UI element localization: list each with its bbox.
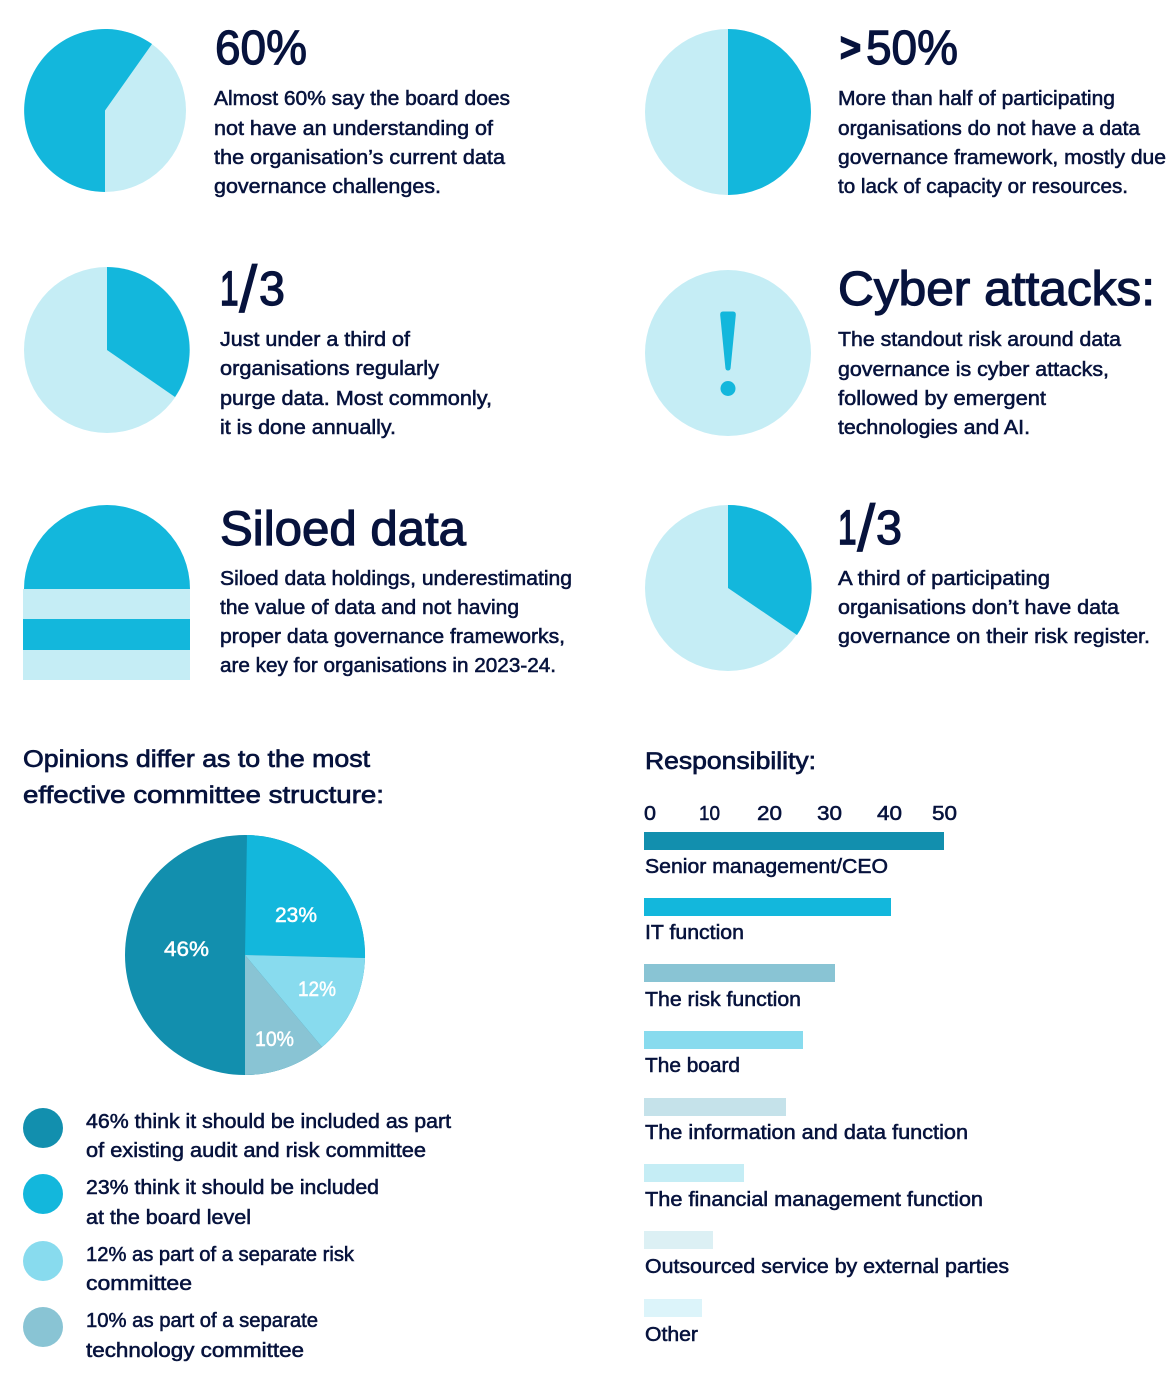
legend item: 46% <box>23 1108 451 1162</box>
icon: 60% pie <box>24 29 186 192</box>
text block: 60% description: Almost 60% say the board does <box>214 88 510 110</box>
text block: cyber description: The standout risk around data <box>838 329 1122 351</box>
heading: Cyber attacks: Cyber attacks: <box>838 263 1155 316</box>
heading: 1/3 <box>838 491 902 565</box>
bar: The information and data function <box>644 1098 968 1144</box>
text block: cyber description: technologies and AI. <box>838 417 1030 439</box>
legend item: 23%: at the board level <box>86 1207 251 1229</box>
bar: The information and data function: The information and data function <box>645 1122 968 1144</box>
bar: Other: Other <box>645 1324 698 1346</box>
panel: cyber attacks <box>645 263 1155 439</box>
panel: committee structure <box>23 746 451 1362</box>
heading: 1/3: 1 <box>220 263 238 316</box>
legend item: 23%: 23% think it should be included <box>86 1177 379 1199</box>
text block: 60% description: governance challenges. <box>214 176 441 198</box>
heading: 1/3: 3 <box>876 502 902 555</box>
pie chart: committee opinions <box>125 835 365 1075</box>
axis labels <box>644 803 957 825</box>
bar: IT function <box>644 898 891 944</box>
icon: striped semicircle <box>23 505 190 680</box>
legend item: 10% <box>23 1307 318 1362</box>
legend item: 46%: of existing audit and risk committee <box>86 1140 426 1162</box>
text block: siloed description: proper data governance frameworks, <box>220 626 565 648</box>
text block: risk register description: governance on their risk register. <box>838 626 1150 648</box>
axis labels: 30 <box>817 803 842 825</box>
text block: cyber description <box>838 329 1122 439</box>
bar: The board: The board <box>645 1055 740 1077</box>
heading: 1/3: / <box>857 491 876 565</box>
bar: Outsourced service by external parties <box>644 1231 1009 1278</box>
text block: purge description: organisations regularly <box>220 358 439 380</box>
text block: purge description: Just under a third of <box>220 329 410 351</box>
axis labels: 0 <box>644 803 656 825</box>
legend item: 12% <box>23 1241 355 1295</box>
bar: Other <box>644 1299 702 1346</box>
heading: >50%: 50% <box>866 22 958 75</box>
pie chart: committee opinions: 46% <box>164 938 209 961</box>
text block: cyber description: governance is cyber attacks, <box>838 359 1109 381</box>
text block: siloed description <box>220 568 572 677</box>
text block: 50% description: to lack of capacity or resources. <box>838 176 1128 198</box>
pie chart: committee opinions: 12% <box>298 978 336 1001</box>
panel: 60% statistic <box>24 22 510 198</box>
axis labels: 20 <box>757 803 782 825</box>
text block: risk register description: organisations don’t have data <box>838 597 1120 619</box>
axis labels: 40 <box>877 803 902 825</box>
pie chart: committee opinions: 10% <box>255 1028 294 1051</box>
text block: siloed description: Siloed data holdings, underestimating <box>220 568 572 590</box>
bar: The board <box>644 1031 803 1077</box>
panel: 1/3 purge statistic <box>24 252 492 439</box>
bar: IT function: IT function <box>645 922 744 944</box>
text block: 60% description: not have an understanding of <box>214 118 493 140</box>
legend item: 10%: 10% as part of a separate <box>86 1310 318 1332</box>
heading: committee structure: effective committee structure: <box>23 782 384 809</box>
text block: 60% description: the organisation’s current data <box>214 147 506 169</box>
bar: Outsourced service by external parties: Outsourced service by external parties <box>645 1256 1009 1278</box>
panel: more than 50% statistic <box>645 22 1166 198</box>
bar: Senior management/CEO: Senior management/CEO <box>645 856 888 878</box>
heading: committee structure <box>23 746 384 809</box>
text block: 60% description <box>214 88 510 198</box>
text block: purge description <box>220 329 492 439</box>
icon: one third pie <box>24 267 190 433</box>
legend item: 10%: technology committee <box>86 1340 304 1362</box>
text block: 50% description: More than half of participating <box>838 88 1115 110</box>
text block: purge description: purge data. Most commonly, <box>220 388 492 410</box>
bar: The risk function <box>644 964 835 1011</box>
text block: siloed description: are key for organisations in 2023-24. <box>220 655 556 677</box>
heading: 1/3: / <box>239 252 258 326</box>
axis labels: 50 <box>932 803 957 825</box>
legend: committee opinions <box>23 1108 451 1362</box>
heading: Responsibility: Responsibility: <box>645 748 816 775</box>
text block: cyber description: followed by emergent <box>838 388 1046 410</box>
legend item: 12%: 12% as part of a separate risk <box>86 1244 355 1266</box>
panel: 1/3 risk register statistic <box>645 491 1150 671</box>
text block: siloed description: the value of data and not having <box>220 597 519 619</box>
heading: committee structure: Opinions differ as to the most <box>23 746 370 773</box>
text block: 50% description: governance framework, mostly due <box>838 147 1166 169</box>
heading: >50%: > <box>840 26 861 70</box>
heading: 1/3: 3 <box>259 263 285 316</box>
heading: 1/3: 1 <box>838 502 856 555</box>
icon: exclamation circle <box>645 270 811 436</box>
bar: Senior management/CEO <box>644 832 944 878</box>
legend item: 23% <box>23 1174 379 1229</box>
panel: responsibility <box>644 748 1009 1346</box>
legend item: 46%: 46% think it should be included as part <box>86 1111 451 1133</box>
text block: risk register description <box>838 568 1150 648</box>
icon: half pie <box>645 29 811 195</box>
axis labels: 10 <box>699 803 720 825</box>
icon: one third pie <box>645 505 812 671</box>
bar: The financial management function: The financial management function <box>645 1189 983 1211</box>
heading: 1/3 <box>220 252 285 326</box>
text block: purge description: it is done annually. <box>220 417 396 439</box>
legend item: 12%: committee <box>86 1273 192 1295</box>
bar: The risk function: The risk function <box>645 989 801 1011</box>
bar: The financial management function <box>644 1164 983 1211</box>
heading: Siloed data: Siloed data <box>220 503 466 556</box>
text block: risk register description: A third of participating <box>838 568 1050 590</box>
pie chart: committee opinions: 23% <box>275 904 317 927</box>
text block: 50% description: organisations do not have a data <box>838 118 1141 140</box>
panel: siloed data <box>23 503 572 680</box>
heading: 60%: 60% <box>215 22 307 75</box>
text block: 50% description <box>838 88 1166 198</box>
